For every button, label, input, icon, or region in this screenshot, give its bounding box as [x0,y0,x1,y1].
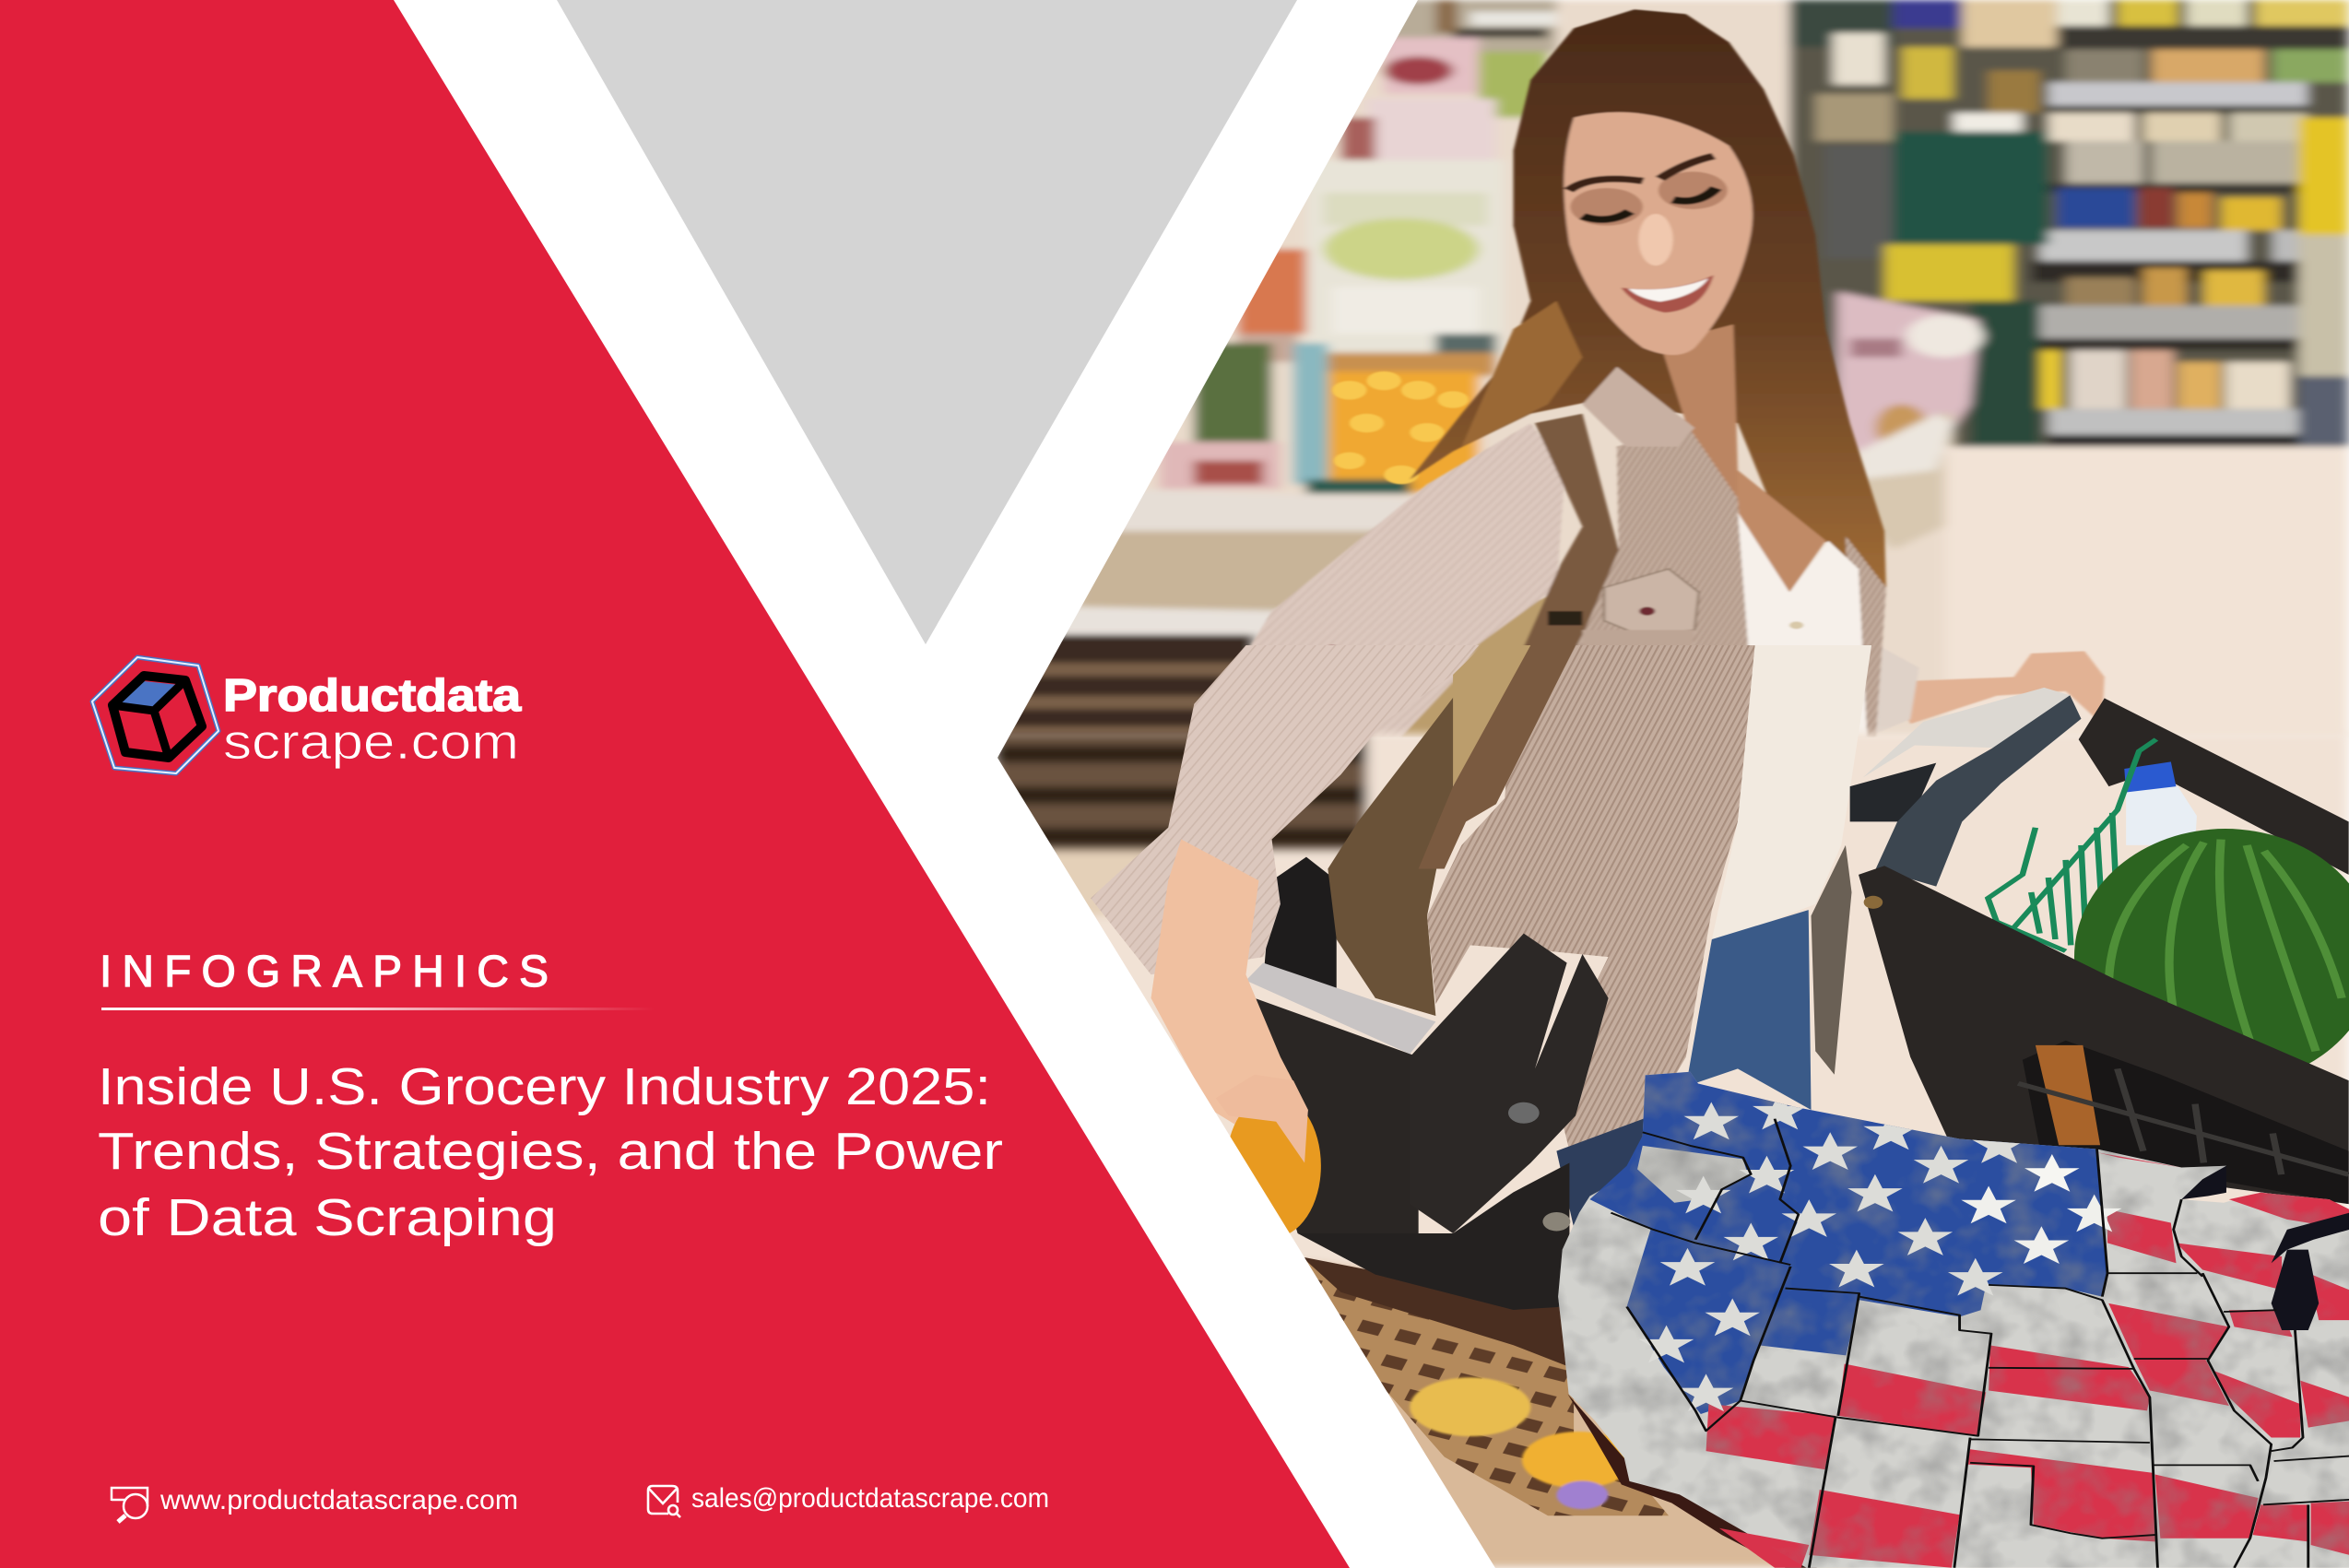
bag [1328,687,1461,1016]
oranges in basket [1410,1377,1635,1509]
blouse buttons [1789,621,1803,629]
eye sockets [1570,171,1728,226]
carrots [2036,1045,2100,1145]
woman upper body [1194,9,2105,737]
panel: grey triangle [557,0,1297,644]
map grey stripes base [1558,1072,2349,1568]
logo word: scrape.com: scrape.com [223,714,519,770]
left sleeve cuff [1091,645,1479,974]
cart bolt [1864,896,1883,909]
woven bag panel lower [1453,645,1532,786]
left sleeve [1194,423,1565,737]
blouse lower [1712,645,1871,939]
eyebrows [1569,156,1714,191]
water bottle [2126,786,2197,845]
shirt side tail [1812,845,1852,1075]
hair highlights [1461,301,1582,446]
cart dark wall [1255,998,1419,1233]
map stars [1639,1092,2122,1411]
bottle cap [2124,761,2176,793]
divider rule under heading [101,1008,655,1010]
title line 2: Trends, Strategies, and the Power [98,1122,1003,1181]
map: U.S. flag map [1558,1072,2349,1568]
cart wheel bolt [1542,1212,1570,1231]
map blue canton [1589,1072,2107,1414]
map crumple texture [1558,1072,2349,1568]
cuff button [1326,645,1340,653]
orange in hand [1226,1094,1321,1237]
orange highlights [1332,371,1469,484]
shirt side panel [1846,536,1886,737]
icon: web search [112,1488,148,1522]
smile [1622,275,1714,312]
panel: red diagonal panel [0,0,1350,1568]
photo upper half: store background and woman [996,0,2349,737]
handle stub [1850,763,1936,821]
cart foreground [1091,645,2349,1310]
fingers [1216,1075,1308,1162]
map underside [1567,1394,1817,1568]
website text: www.productdatascrape.com [159,1485,518,1515]
blouse [1738,513,1867,737]
right forearm and hand [1893,651,2105,724]
cart child seat flap [1410,934,1609,1233]
great lakes [2181,1166,2349,1330]
green basket rack [1988,739,2156,951]
photo lower half: arms, cart and basket [996,645,2349,1567]
icon: hexagon and cube [92,657,218,773]
watermelon [2074,829,2349,1085]
under cart [1298,1162,1569,1310]
shirt hem [1427,645,1755,1151]
collar [1582,367,1694,446]
strap buckle [1548,611,1582,625]
logo: Productdata scrape.com [92,657,522,773]
strap [1419,645,1576,868]
jeans [1686,910,1812,1110]
face [1564,112,1753,355]
cart hinge [1508,1102,1540,1124]
map grey patch [1637,1146,1748,1203]
photo: shopper in grocery store [996,0,2349,1568]
pocket button [1639,607,1655,616]
footer: website [112,1485,518,1522]
handle bar [1876,695,2081,887]
neck [1660,324,1738,513]
eyes [1582,188,1717,219]
patterned paper [1245,963,1435,1054]
nose highlight [1638,214,1673,265]
title line 3: of Data Scraping [98,1188,557,1247]
title line 1: Inside U.S. Grocery Industry 2025: [98,1057,991,1116]
email text: sales@productdatascrape.com [691,1483,1049,1514]
handle plate [1863,688,2070,778]
basket dark top edge [1302,1257,1574,1369]
cart side opening [2023,1041,2349,1204]
woven bag panel [1401,597,1547,737]
chest pocket [1604,569,1699,634]
forearm [1151,840,1308,1166]
right sleeve [1877,649,1918,730]
pocket body [1582,630,1694,710]
blurred store background [996,0,2349,737]
heading: INFOGRAPHICS: INFOGRAPHICS [100,948,549,996]
shoulder strap [1483,414,1619,737]
title block [98,1057,1003,1247]
black seat behind arm [1263,857,1337,1010]
chest skin V [1738,470,1825,593]
blurred lower background [996,734,2349,1567]
watermelon stripes [2108,840,2342,1057]
logo word: Productdata: Productdata [223,671,522,721]
hair [1410,9,1886,587]
far cart rail [2079,698,2349,875]
map red stripes [1706,1152,2349,1568]
cart grid bars [2018,1068,2349,1174]
footer: email [648,1483,1049,1517]
cart side panel [1859,866,2349,1204]
state borders [1611,1119,2349,1568]
icon: mail search [648,1486,680,1517]
produce basket [1298,1257,1669,1515]
shirt body [1530,423,1755,737]
jeans lower [1556,1086,1686,1233]
